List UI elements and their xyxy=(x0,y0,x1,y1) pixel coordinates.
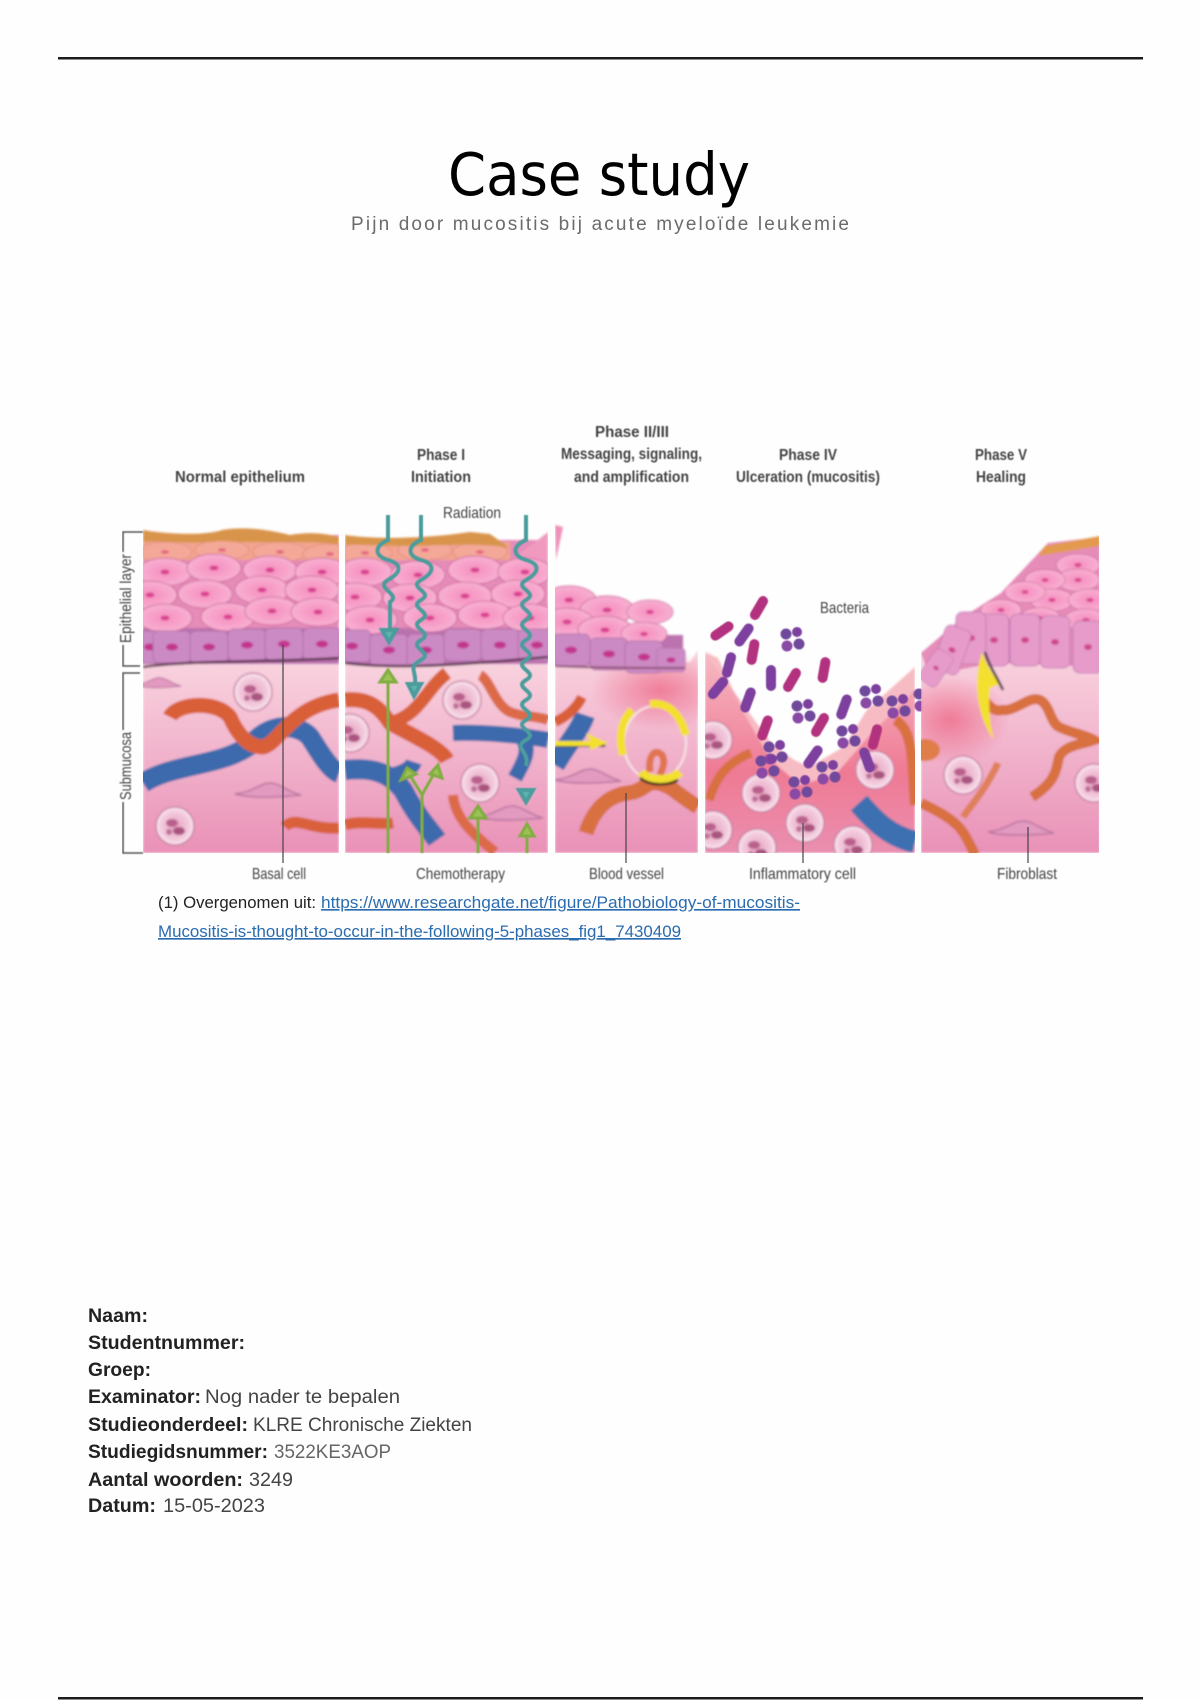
phase headings: Phase V xyxy=(975,447,1027,464)
panel: normal epithelium xyxy=(143,526,339,853)
student details block: 15-05-2023 xyxy=(163,1496,265,1517)
subtitle: Pijn door mucositis bij acute myeloïde leukemie xyxy=(351,214,849,235)
phase headings: Initiation xyxy=(411,469,471,486)
phase headings: Phase I xyxy=(417,447,465,464)
student details block: Aantal woorden: xyxy=(88,1470,243,1491)
student details block xyxy=(88,1306,472,1517)
layer labels: Submucosa xyxy=(118,732,135,800)
student details block: KLRE Chronische Ziekten xyxy=(253,1415,472,1436)
layer brackets xyxy=(123,532,143,853)
layer labels: Epithelial layer xyxy=(118,553,135,643)
arrows: chemotherapy xyxy=(380,670,534,853)
callout labels: Bacteria xyxy=(820,600,869,617)
callout labels: Radiation xyxy=(443,505,501,522)
phase headings: Phase IV xyxy=(779,447,837,464)
student details block: Datum: xyxy=(88,1496,156,1517)
student details block: Nog nader te bepalen xyxy=(205,1387,400,1408)
student details block: Naam: xyxy=(88,1306,148,1327)
figure: pathobiology of mucositis xyxy=(118,424,1113,883)
callout labels: Inflammatory cell xyxy=(749,866,856,883)
phase headings: Ulceration (mucositis) xyxy=(736,469,880,486)
footer rule xyxy=(58,1697,1143,1700)
figure source caption xyxy=(158,894,800,941)
student details block: Studieonderdeel: xyxy=(88,1415,248,1436)
phase headings: Messaging, signaling, xyxy=(561,446,702,463)
panel: phase II/III signaling xyxy=(555,524,698,853)
student details block: Studiegidsnummer: xyxy=(88,1442,268,1463)
bacteria xyxy=(706,594,938,800)
panel: phase V healing xyxy=(921,534,1099,853)
phase headings: Healing xyxy=(976,469,1026,486)
phase headings xyxy=(175,424,1027,486)
layer labels xyxy=(118,553,135,800)
header rule xyxy=(58,57,1143,60)
callout labels: Fibroblast xyxy=(997,866,1057,883)
title: Case study xyxy=(448,140,750,209)
student details block: 3522KE3AOP xyxy=(274,1442,391,1463)
leader lines xyxy=(283,645,1028,863)
student details block: Studentnummer: xyxy=(88,1333,245,1354)
panel: phase I initiation xyxy=(345,530,548,853)
student details block: Examinator: xyxy=(88,1387,201,1408)
figure source caption: (1) Overgenomen uit: xyxy=(158,894,316,912)
phase headings: and amplification xyxy=(574,469,689,486)
figure source caption: Mucositis-is-thought-to-occur-in-the-following-5-phases_fig1_7430409 xyxy=(158,923,681,941)
figure source caption: https://www.researchgate.net/figure/Pathobiology-of-mucositis- xyxy=(321,894,800,912)
student details block: Groep: xyxy=(88,1360,151,1381)
callout labels xyxy=(252,505,1057,883)
callout labels: Blood vessel xyxy=(589,866,664,883)
phase headings: Phase II/III xyxy=(595,424,669,441)
callout labels: Basal cell xyxy=(252,866,306,883)
student details block: 3249 xyxy=(249,1470,293,1491)
panel: phase IV ulceration xyxy=(705,652,915,853)
phase headings: Normal epithelium xyxy=(175,469,305,486)
callout labels: Chemotherapy xyxy=(416,866,505,883)
arrows: radiation xyxy=(378,515,536,802)
